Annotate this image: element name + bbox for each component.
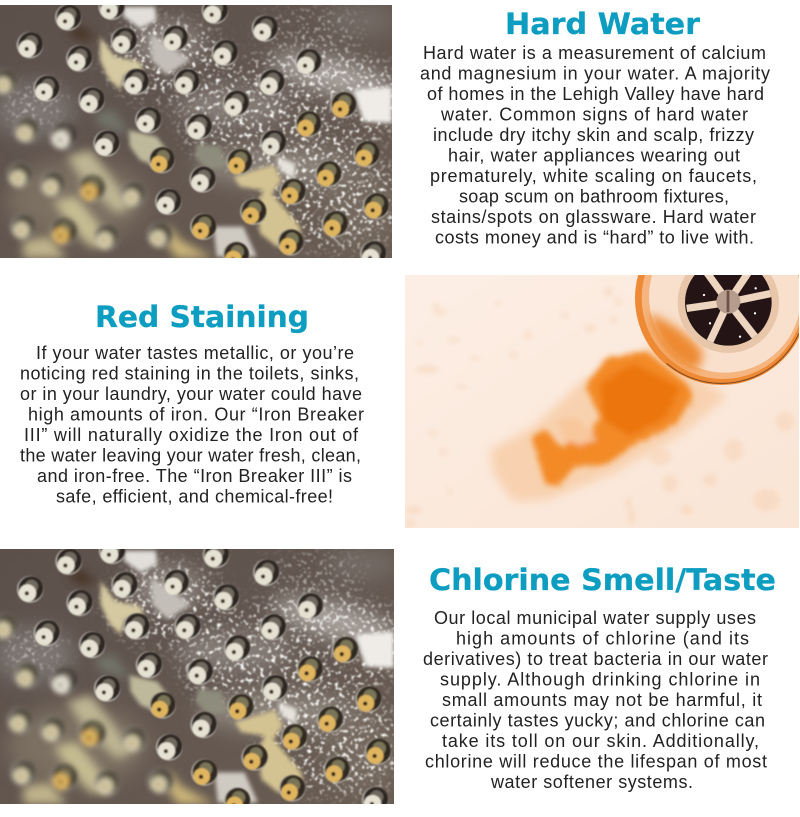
text block: Red Staining description: If your water tastes metallic, or you’re [36, 343, 354, 363]
text block: Red Staining description: III” will naturally oxidize the Iron out of [24, 425, 359, 445]
heading: Red Staining: Red Staining [95, 300, 309, 334]
text block: Hard Water description: include dry itchy skin and scalp, frizzy [433, 125, 754, 145]
photo: hard water scale on metal grater [0, 5, 392, 258]
text block: Chlorine description: chlorine will reduce the lifespan of most [425, 752, 767, 772]
text block: Chlorine description: take its toll on our skin. Additionally, [442, 731, 759, 751]
text block: Red Staining description: and iron-free. The “Iron Breaker III” is [37, 466, 352, 486]
text block: Red Staining description: the water leaving your water fresh, clean, [20, 446, 361, 466]
text block: Hard Water description: prematurely, white scaling on faucets, [430, 166, 757, 186]
drain assembly [635, 275, 799, 385]
text block: Red Staining description: high amounts of iron. Our “Iron Breaker [28, 404, 364, 424]
text block: Chlorine description: high amounts of chlorine (and its [456, 628, 749, 648]
heading: Chlorine Smell/Taste: Chlorine Smell/Taste [429, 563, 776, 597]
text block: Hard Water description: and magnesium in your water. A majority [420, 64, 770, 84]
text block: Red Staining description: safe, efficient, and chemical-free! [56, 486, 333, 506]
text block: Chlorine description: derivatives) to treat bacteria in our water [423, 649, 768, 669]
photo: orange iron stain around a sink drain [405, 275, 799, 528]
text block: Chlorine description: supply. Although drinking chlorine in [440, 670, 760, 690]
text block: Chlorine description: Our local municipal water supply uses [434, 608, 756, 628]
stain halo [490, 347, 727, 502]
faint mottling [405, 287, 794, 528]
text block: Red Staining description [20, 343, 364, 506]
text block: Hard Water description [420, 43, 770, 248]
text block: Chlorine description: small amounts may not be harmful, it [442, 690, 762, 710]
text block: Hard Water description: water. Common signs of hard water [440, 104, 748, 124]
text block: Red Staining description: noticing red staining in the toilets, sinks, [20, 364, 359, 384]
text block: Red Staining description: or in your laundry, your water could have [20, 384, 362, 404]
text block: Hard Water description: soap scum on bathroom fixtures, [459, 186, 729, 206]
text block: Hard Water description: of homes in the Lehigh Valley have hard [427, 84, 764, 104]
text block: Chlorine description: certainly tastes yucky; and chlorine can [430, 710, 765, 730]
photo: scale on metal grater, repeated [0, 549, 394, 804]
text block: Hard Water description: Hard water is a measurement of calcium [423, 43, 766, 63]
text block: Hard Water description: stains/spots on glassware. Hard water [431, 207, 756, 227]
stain body [532, 352, 693, 487]
text block: Chlorine description: water softener systems. [490, 772, 693, 792]
heading: Hard Water: Hard Water [505, 7, 701, 41]
text block: Hard Water description: costs money and is “hard” to live with. [435, 228, 754, 248]
text block: Chlorine description [423, 608, 768, 792]
text block: Hard Water description: hair, water appliances wearing out [448, 146, 740, 166]
